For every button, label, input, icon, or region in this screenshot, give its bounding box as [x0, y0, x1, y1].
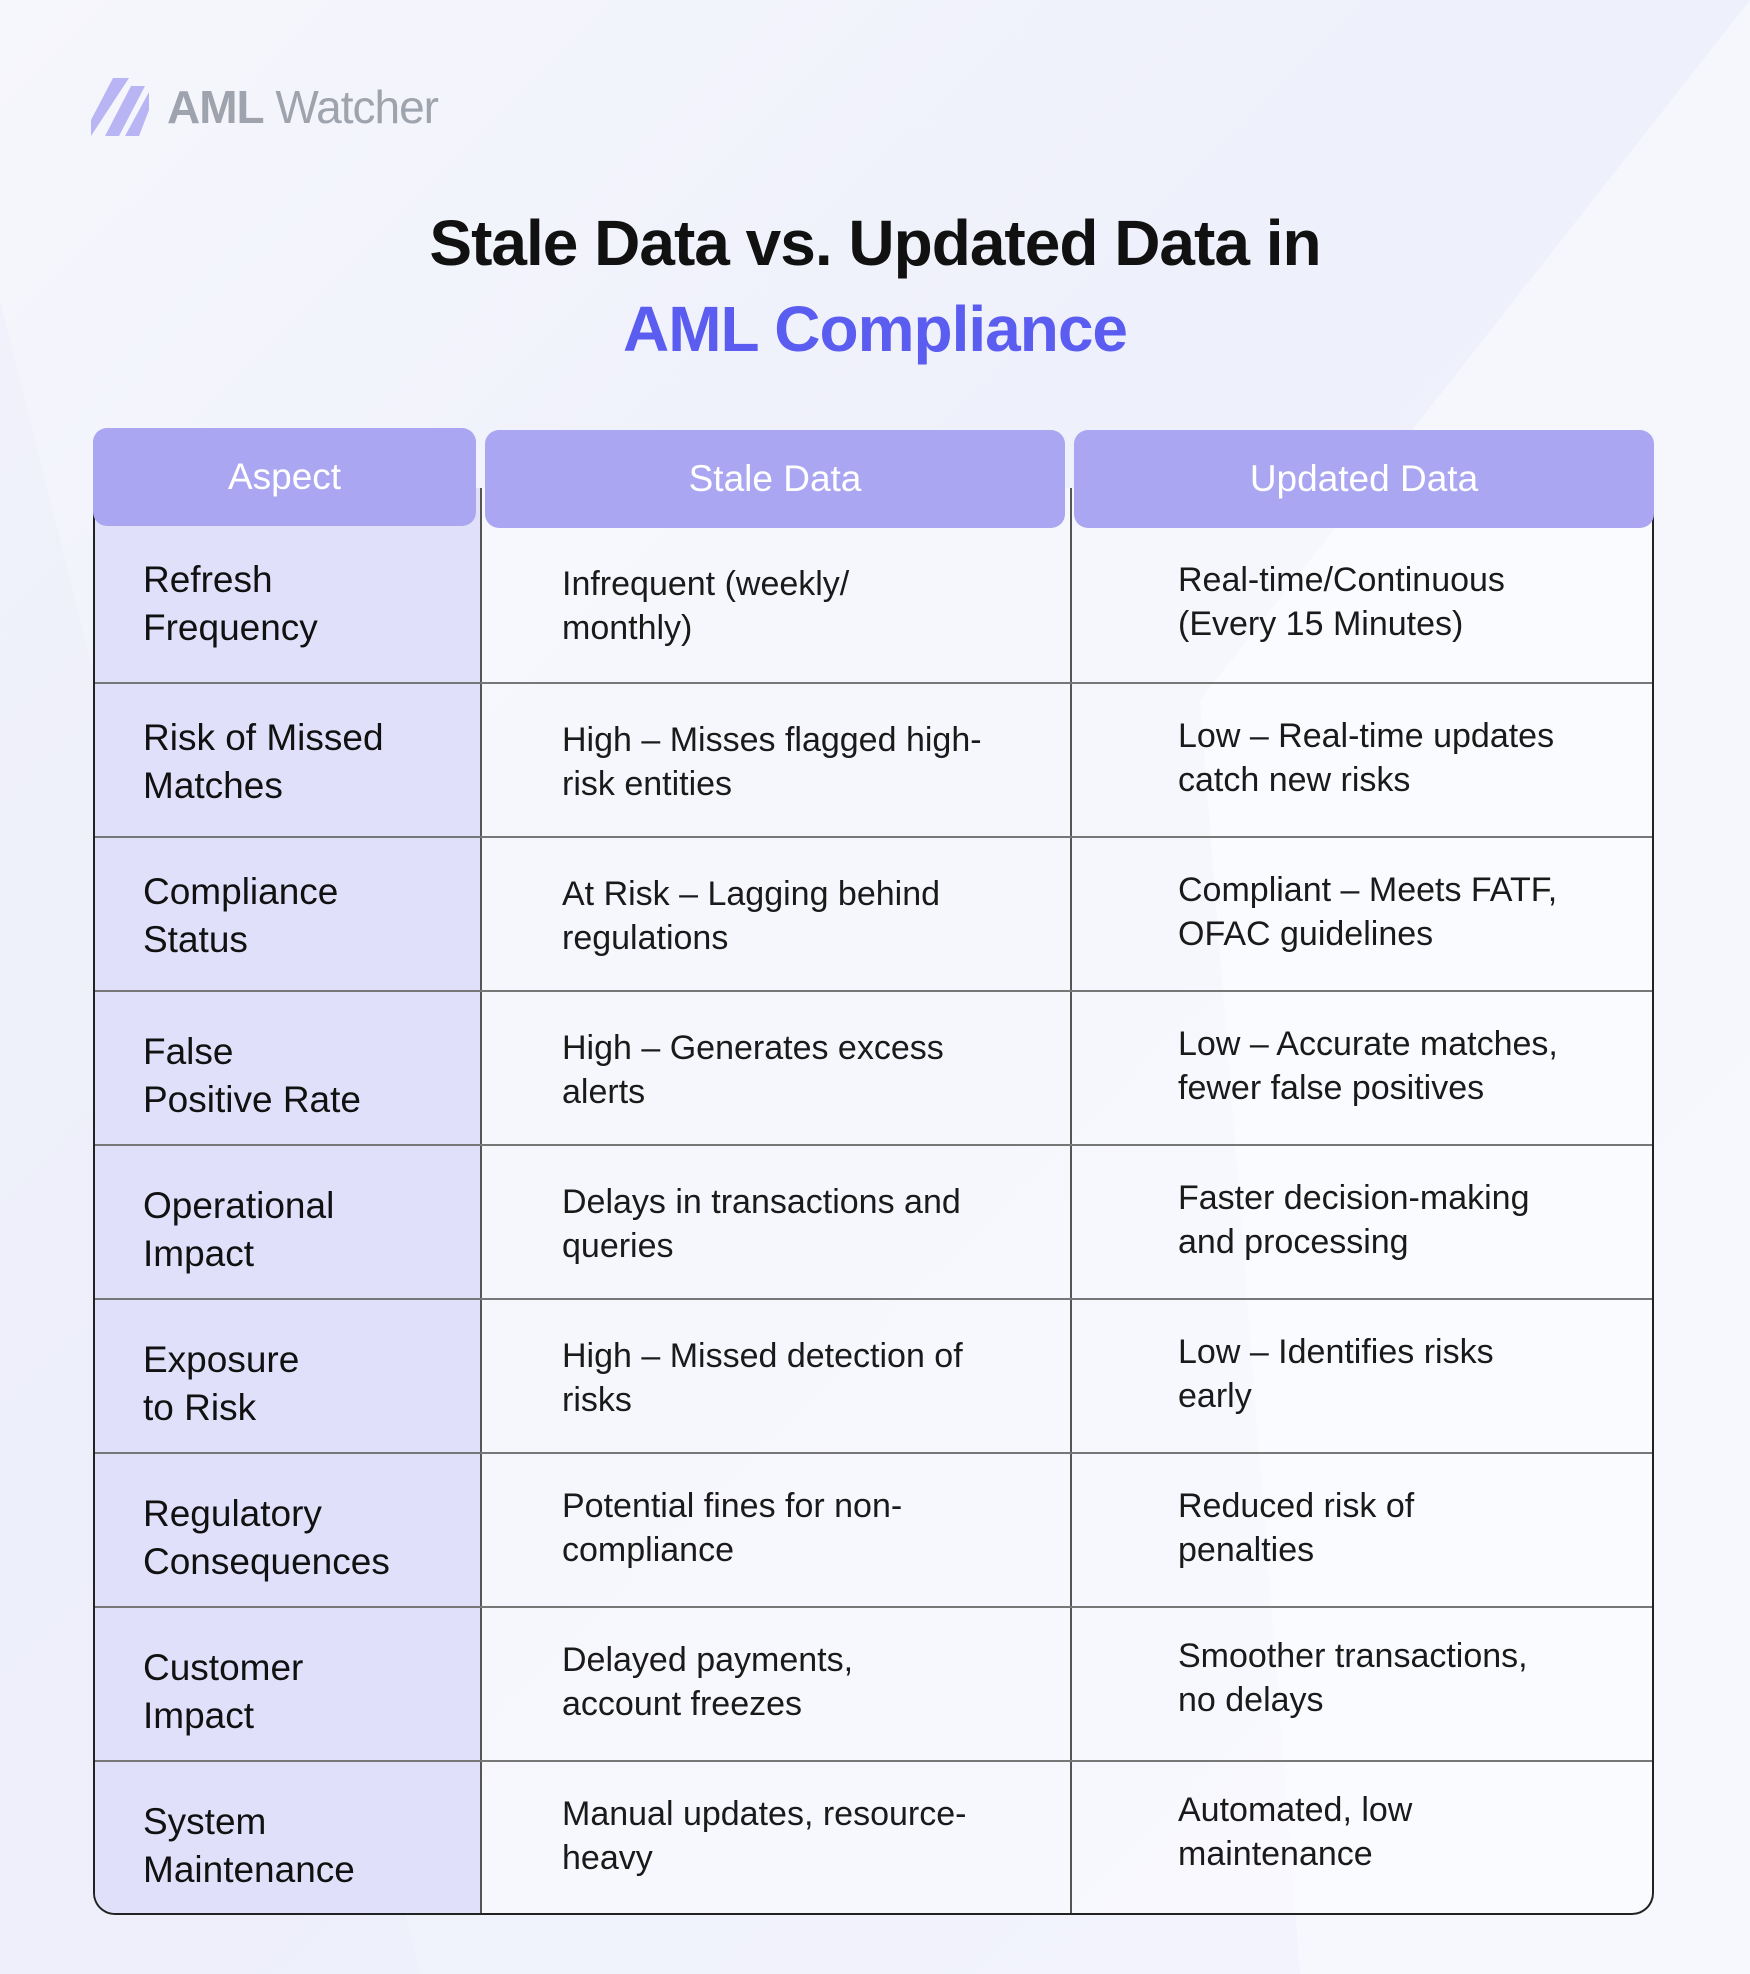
row: maintenance: Manual updates, resource-: [562, 1795, 966, 1833]
row: maintenance: Maintenance: [143, 1849, 355, 1890]
row: false positive: False: [143, 1031, 233, 1072]
row: customer: account freezes: [562, 1685, 802, 1723]
row: customer: Smoother transactions,: [1178, 1637, 1528, 1675]
row: exposure: to Risk: [143, 1387, 256, 1428]
row: refresh frequency: Real-time/Continuous: [1178, 561, 1505, 599]
row: regulatory: Reduced risk of: [1178, 1487, 1414, 1525]
row: false positive: High – Generates excess: [562, 1029, 944, 1067]
row: maintenance: [143, 1791, 1412, 1890]
title: AML Compliance: [623, 293, 1127, 365]
row: exposure: High – Missed detection of: [562, 1337, 963, 1375]
row: operational impact: Delays in transactions and: [562, 1183, 961, 1221]
header: aspect: Aspect: [228, 456, 341, 497]
row: exposure: Exposure: [143, 1339, 299, 1380]
logo: [91, 78, 438, 136]
row: customer: [95, 1608, 1656, 1762]
row: customer: no delays: [1178, 1681, 1324, 1719]
row: exposure: risks: [562, 1381, 632, 1419]
row: compliance status: Compliance: [143, 871, 338, 912]
row: customer: Delayed payments,: [562, 1641, 853, 1679]
row: regulatory: Regulatory: [143, 1493, 322, 1534]
row: false positive: Low – Accurate matches,: [1178, 1025, 1558, 1063]
row: compliance status: OFAC guidelines: [1178, 915, 1433, 953]
row: maintenance: heavy: [562, 1839, 653, 1877]
row: regulatory: Potential fines for non-: [562, 1487, 902, 1525]
row: refresh frequency: Infrequent (weekly/: [562, 565, 849, 603]
row: exposure: Low – Identifies risks: [1178, 1333, 1494, 1371]
row: operational impact: Operational: [143, 1185, 334, 1226]
row: missed matches: Matches: [143, 765, 283, 806]
header: stale data: Stale Data: [689, 458, 861, 499]
row: false positive: Positive Rate: [143, 1079, 361, 1120]
comparison table: [93, 428, 1654, 1915]
row: maintenance: System: [143, 1801, 266, 1842]
row: compliance status: At Risk – Lagging behind: [562, 875, 940, 913]
row: missed matches: Low – Real-time updates: [1178, 717, 1554, 755]
row: operational impact: [95, 1146, 1656, 1300]
header: stale data: [485, 430, 1065, 528]
row: operational impact: Impact: [143, 1233, 254, 1274]
row: missed matches: High – Misses flagged high-: [562, 721, 982, 759]
row: operational impact: and processing: [1178, 1223, 1409, 1261]
title: Stale Data vs. Updated Data in: [429, 207, 1321, 279]
row: false positive: fewer false positives: [1178, 1069, 1484, 1107]
row: customer: Impact: [143, 1695, 254, 1736]
row: refresh frequency: Refresh: [143, 559, 273, 600]
row: customer: Customer: [143, 1647, 303, 1688]
row: missed matches: risk entities: [562, 765, 732, 803]
row: exposure: [95, 1300, 1656, 1454]
row: maintenance: maintenance: [1178, 1835, 1373, 1873]
row: regulatory: Consequences: [143, 1541, 390, 1582]
row: exposure: early: [1178, 1377, 1252, 1415]
row: missed matches: catch new risks: [1178, 761, 1410, 799]
title: [429, 207, 1321, 365]
row: regulatory: compliance: [562, 1531, 734, 1569]
row: compliance status: Compliant – Meets FATF,: [1178, 871, 1557, 909]
logo: AML Watcher: [167, 81, 438, 133]
row: operational impact: Faster decision-making: [1178, 1179, 1529, 1217]
row: refresh frequency: monthly): [562, 609, 692, 647]
row: compliance status: [95, 838, 1656, 992]
row: regulatory: penalties: [1178, 1531, 1314, 1569]
row: refresh frequency: (Every 15 Minutes): [1178, 605, 1463, 643]
row: operational impact: queries: [562, 1227, 674, 1265]
row: false positive: alerts: [562, 1073, 645, 1111]
row: refresh frequency: Frequency: [143, 607, 318, 648]
header: updated data: Updated Data: [1250, 458, 1478, 499]
row: compliance status: regulations: [562, 919, 728, 957]
header: updated data: [1074, 430, 1654, 528]
row: missed matches: [95, 684, 1656, 838]
header: aspect: [93, 428, 476, 526]
row: refresh frequency: [95, 488, 1656, 684]
row: compliance status: Status: [143, 919, 248, 960]
row: false positive: [95, 992, 1656, 1146]
row: maintenance: Automated, low: [1178, 1791, 1412, 1829]
row: regulatory: [95, 1454, 1656, 1608]
row: missed matches: Risk of Missed: [143, 717, 384, 758]
